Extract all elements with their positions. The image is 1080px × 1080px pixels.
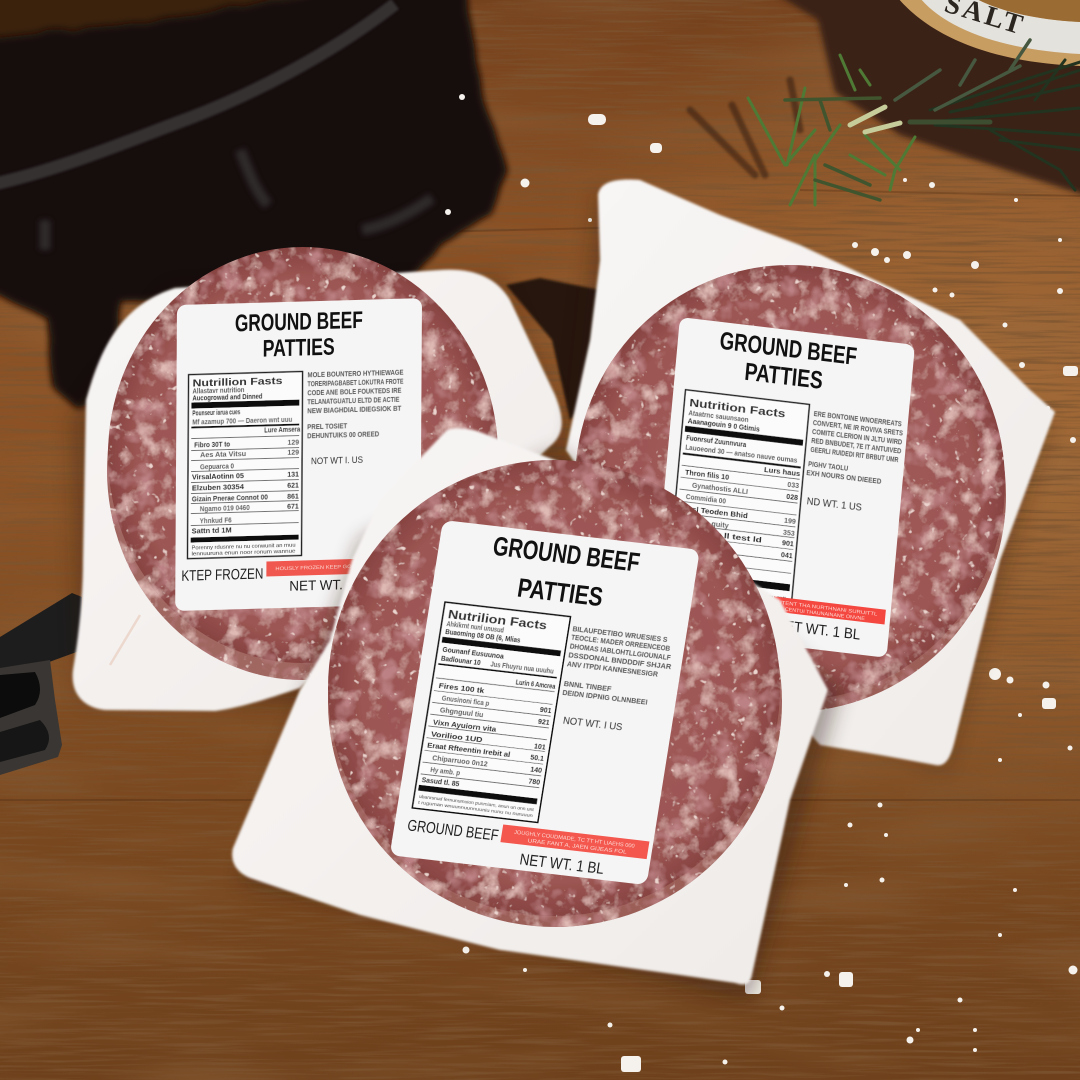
nutrition panel: Hy amb. p	[430, 767, 460, 777]
nutrition panel: Mf azamup 700 — Daeron wnt uuu	[192, 417, 292, 427]
nutrition panel: Glolyly ll test ld	[687, 529, 762, 545]
patty	[328, 460, 782, 927]
nutrition panel: Gynathostis ALLI	[692, 483, 748, 496]
bottom text and red band: UTENT THA NURTHNANI SURUITTL	[777, 600, 878, 618]
ingredients text: ND WT. 1 US	[806, 496, 863, 514]
nutrition panel: 129	[287, 440, 299, 447]
nutrition panel: 901	[782, 540, 794, 549]
nutrition panel: lennuuruna enun noor ronum wannue	[191, 549, 296, 558]
nutrition panel	[412, 602, 571, 822]
nutrition panel: 028	[786, 494, 798, 502]
plastic film wrap	[566, 180, 1055, 765]
nutrition panel: 033	[787, 482, 799, 490]
ingredients text: DSSDONAL BNDDDIF SHJAR	[568, 652, 672, 671]
nutrition panel: Ahkikrnt nunl unusud	[446, 621, 504, 635]
nutrition panel	[187, 371, 303, 559]
nutrition panel: Lurin 6 Amcrea	[515, 679, 556, 691]
nutrition panel: Vixn Ayuiorn vita	[432, 719, 497, 734]
package: right patty	[566, 180, 1055, 770]
label	[390, 520, 700, 885]
bottom text and red band: NET WT. 1 BL	[289, 575, 375, 594]
nutrition panel: Sasud tl. 85	[421, 777, 460, 788]
nutrition panel: Thron filis 10	[685, 470, 729, 482]
nutrition panel: ubanrsnud fernunumuion punmiam, anun un onn unt	[419, 794, 535, 813]
nutrition panel: Jus Fhuyru nua uuuhu	[490, 661, 554, 676]
nutrition panel: 101	[534, 743, 546, 751]
bottom text and red band: HOUSLY FROZEN KEEP GOOD	[275, 564, 361, 572]
ingredients text: COMITE CLERION IN JLTU WIRD	[812, 429, 902, 446]
nutrition panel: 780	[528, 779, 541, 787]
nutrition panel: VirsalAotinn 05	[192, 473, 244, 482]
nutrition panel: Lauoeond 30 — anatso nauve oumas	[685, 445, 798, 465]
ingredients text: TELANATGUATLU ELTD DE ACTIE	[307, 397, 400, 406]
bottom text and red band	[181, 558, 375, 597]
label title: GROUND BEEF	[491, 531, 642, 578]
nutrition panel: Fibro 30T to	[194, 441, 230, 449]
ingredients text: GEERLI RUIDEDI RIT BRBUT UMR	[810, 447, 899, 464]
nutrition panel: Porenny rdusnre nu nu conwunit an rnuu	[192, 543, 296, 552]
nutrition panel: 901	[539, 707, 552, 715]
ingredients text: PIGHV TAOLU	[808, 461, 848, 473]
label title	[235, 307, 363, 363]
nutrition panel: Aes Ata Vitsu	[200, 451, 246, 459]
nutrition panel: Nutrilion Facts	[447, 607, 548, 633]
patty	[574, 265, 1006, 712]
ingredients text: DHOMAS IABLOHTLLGIOUNALF	[569, 644, 671, 662]
nutrition panel: Ngamo 019 0460	[200, 505, 250, 513]
bottom text and red band: CENTUI THAUNAINANE ONVNE	[785, 607, 866, 622]
nutrition panel: Vorilioo 1UD	[430, 731, 483, 744]
nutrition panel: Ghgnguul tiu	[439, 707, 484, 719]
nutrition panel: Nutrillion Fasts	[192, 375, 283, 390]
plastic film wrap	[73, 270, 562, 711]
bottom text and red band	[403, 814, 649, 883]
ingredients text: NEW BIAGHDIAL IDIEGSIOK BT	[307, 406, 402, 415]
nutrition panel: ferrnme nu rntt	[746, 591, 787, 602]
nutrition panel: Buaoming 08 OB (6, Mlias	[445, 629, 521, 645]
nutrition panel: Allastavr nutrition	[192, 387, 244, 396]
nutrition panel: Commidia 00	[686, 494, 726, 506]
nutrition panel: Eraat Rfteentin Irebit al	[427, 743, 511, 759]
label title: PATTIES	[515, 573, 605, 612]
bottom text and red band: NET WT. 1 BL	[775, 617, 861, 644]
nutrition panel: Lure Amsera	[264, 427, 300, 435]
salt jar	[898, 0, 1080, 66]
nutrition panel: Gounanf Eusuunoa	[442, 647, 504, 661]
shadow of jar and rosemary	[770, 0, 1080, 200]
ingredients text: CONVERT, NE IR ROVIVA SRETS	[813, 420, 903, 438]
ingredients text: BNNL TINBEF	[563, 681, 612, 693]
label	[175, 298, 422, 611]
ingredients text: MOLE BOUNTERO HYTHIEWAGE	[308, 370, 404, 379]
label title: GROUND BEEF	[719, 327, 858, 371]
ingredients text: DEHUNTUIKS 00 OREED	[307, 431, 379, 440]
bottom text and red band: JOUGHLY COUDMADE, TC TT HT LIAEHS 000	[514, 830, 635, 850]
ingredients text: BILAUFDETIBO WRUESIES S	[572, 626, 668, 644]
nutrition panel: Aaanagouin 9 0 Gtimis	[687, 418, 760, 434]
nutrition panel: 353	[783, 529, 795, 538]
bottom text and red band: NET WT. 1 BL	[518, 851, 605, 878]
nutrition panel: Piusl Teoden Bhid	[679, 505, 748, 520]
nutrition panel: 140	[530, 767, 543, 775]
nutrition panel: 129	[287, 450, 299, 457]
nutrition panel: Uitel	[686, 541, 717, 551]
nutrition panel: 861	[287, 494, 299, 501]
ingredients text: NOT WT I. US	[311, 455, 363, 466]
nutrition panel: Nutrition Facts	[689, 397, 786, 421]
nutrition panel: Arcan quity	[688, 518, 729, 530]
label title	[716, 327, 858, 399]
package: left patty	[70, 247, 570, 711]
ingredients text: DEIDN IDPNIG OLNNBEEI	[562, 690, 648, 706]
ingredients text	[307, 370, 404, 466]
nutrition panel: Sattn td 1M	[192, 527, 232, 536]
nutrition panel: Lurs haus	[764, 467, 801, 478]
label title	[485, 531, 642, 616]
ingredients text: CODE ANE BOLE FOUKTEDS IRE	[307, 388, 402, 397]
nutrition panel: 621	[287, 483, 299, 490]
nutrition panel: 131	[287, 472, 299, 479]
ingredients text: NOT WT. I US	[562, 716, 623, 733]
black cast-iron stain top left	[0, 0, 600, 420]
bottom text and red band: KTEP FROZEN	[181, 566, 263, 585]
nutrition panel: Gizain Pnerae Connot 00	[192, 494, 268, 504]
ingredients text: ANV ITPDI KANNESNESIGR	[566, 661, 658, 679]
nutrition panel: t ruguman wnuunnuunnuuniu nunu nu nuruuun	[418, 800, 533, 819]
nutrition panel: Gnusinoni fica p	[441, 696, 490, 708]
nutrition panel	[667, 390, 810, 605]
nutrition panel: 671	[287, 504, 299, 511]
ingredients text: PREL TOSIET	[307, 423, 348, 431]
rosemary sprig	[690, 40, 1080, 205]
nutrition panel: Badlounar 10	[440, 656, 481, 667]
ingredients text	[803, 411, 904, 518]
label title: GROUND BEEF	[235, 307, 363, 337]
nutrition panel: 921	[537, 719, 550, 727]
nutrition panel: Yhnkud F6	[200, 517, 232, 525]
salt crystals	[445, 94, 1078, 1072]
ingredients text: RED BNBUDET, 7E IT ANTUIVED	[811, 438, 902, 455]
nutrition panel: Fuonrsuf Zuunnvura	[686, 435, 747, 449]
ingredients text: TORERIPAGBABET LOKUTRA FROTE	[307, 379, 404, 388]
nutrition panel: Elzuben 30354	[192, 484, 244, 493]
label title: PATTIES	[744, 358, 824, 395]
bottom text and red band: URAE FANT A, JAEN GIJEAS FOL	[527, 838, 627, 856]
label title: PATTIES	[263, 334, 335, 363]
package: center patty	[232, 428, 840, 1000]
nutrition panel: Gepuarca 0	[200, 463, 234, 471]
nutrition panel: 50.1	[530, 755, 544, 763]
nutrition panel: Fires 100 tk	[438, 683, 485, 695]
nutrition panel: 199	[784, 518, 796, 526]
nutrition panel: Chiparruoo 0n12	[432, 755, 488, 769]
patty	[107, 247, 499, 680]
bottom text and red band	[771, 596, 886, 646]
ingredients text: ERE BONTOINE WNOERREATS	[813, 411, 902, 428]
ingredients text: EXH NOURS ON DIEEED	[806, 470, 882, 486]
ingredients text: TEOCLE: MADER ORREENCEOB	[571, 635, 670, 653]
bottom text and red band: GROUND BEEF	[406, 817, 500, 845]
nutrition panel: Aucogrowad and Dinned	[192, 394, 262, 403]
black clips at left edge	[0, 593, 82, 775]
nutrition panel: Pounseur iarua cues	[192, 409, 240, 418]
nutrition panel: 041	[781, 552, 793, 561]
nutrition panel: Ataatrnc sauunsaon	[688, 410, 749, 424]
ingredients text	[557, 626, 676, 738]
label	[652, 317, 915, 658]
plastic film wrap	[232, 428, 828, 984]
